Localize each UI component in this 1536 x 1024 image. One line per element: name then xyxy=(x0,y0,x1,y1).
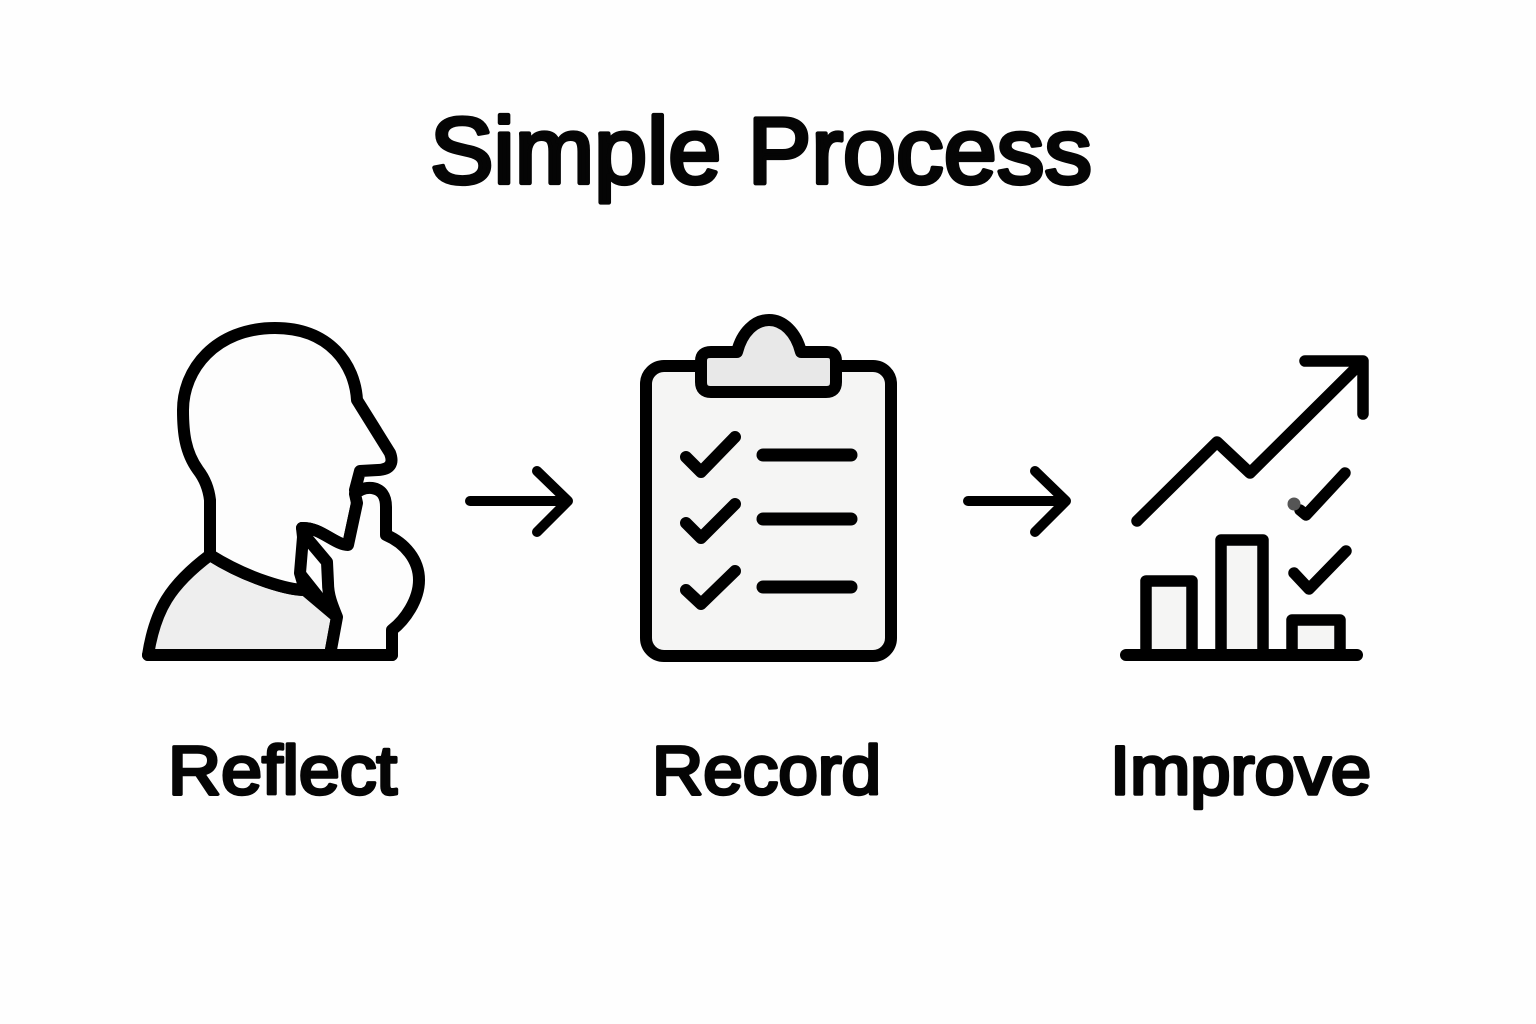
arrow: record to improve xyxy=(968,471,1066,532)
label: Record: Record xyxy=(652,732,881,809)
person hand xyxy=(302,488,419,655)
arrow: reflect to record xyxy=(470,471,568,532)
check row 3 xyxy=(686,571,851,604)
icon: person reflecting xyxy=(148,328,419,655)
person torso xyxy=(148,555,337,655)
trend arrow xyxy=(1137,361,1363,521)
title: Simple Process xyxy=(430,98,1092,203)
clipboard clip xyxy=(701,320,836,392)
bar 2 xyxy=(1221,540,1263,655)
check row 2 xyxy=(686,504,851,538)
icon: clipboard checklist xyxy=(646,320,891,656)
bar 3 xyxy=(1292,620,1340,655)
label: Improve: Improve xyxy=(1110,732,1371,809)
person head xyxy=(183,328,392,590)
icon: growth chart xyxy=(1126,361,1363,655)
person inner palm gap xyxy=(300,537,327,607)
small check 2 xyxy=(1294,551,1346,589)
label: Reflect: Reflect xyxy=(168,732,397,809)
bar 1 xyxy=(1146,581,1192,655)
chart baseline xyxy=(1126,649,1357,661)
small check 1 xyxy=(1288,473,1345,515)
clipboard board xyxy=(646,366,891,656)
person base line xyxy=(148,649,392,661)
check row 1 xyxy=(686,437,851,472)
